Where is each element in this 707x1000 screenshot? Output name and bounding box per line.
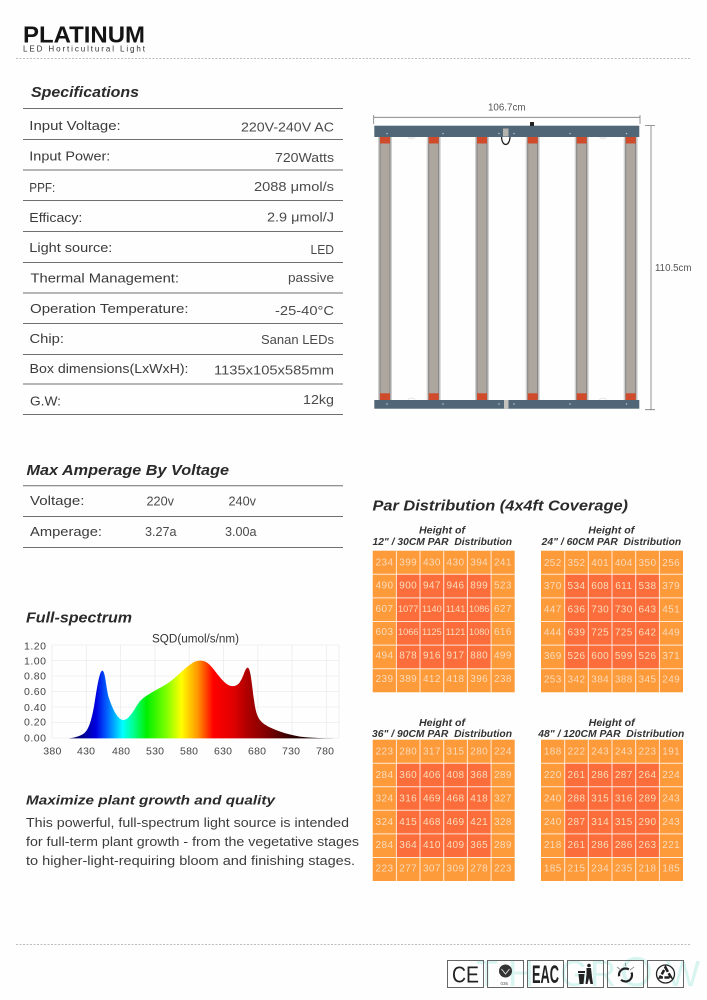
heatmap: 48 inch: 263 <box>639 840 656 851</box>
icon: EAC: EAC <box>532 961 559 989</box>
heatmap: 24 inch: 384 <box>591 674 609 686</box>
chart: spectrum: 0.60 <box>24 686 46 698</box>
panel: max amperage: 3.00a <box>225 525 257 539</box>
chart: spectrum: 580 <box>180 745 198 757</box>
heatmap: 24 inch: Height of <box>588 526 636 537</box>
heatmap: 12 inch: 607 <box>376 604 393 615</box>
heatmap: 36 inch: 421 <box>470 817 488 828</box>
heatmap: 24 inch: 401 <box>591 558 609 569</box>
heatmap: 12 inch: 12" / 30CM PAR Distribution <box>372 537 512 548</box>
heatmap: 12 inch: 603 <box>376 627 393 638</box>
heatmap: 12 inch: 627 <box>494 604 512 615</box>
watermark: T <box>476 953 498 994</box>
heatmap: 24 inch: 350 <box>639 558 656 569</box>
icon: energy mark <box>488 960 524 988</box>
heatmap: 24 inch: 371 <box>662 651 680 662</box>
panel: max amperage: 220v <box>146 495 175 509</box>
heatmap: 48 inch: 286 <box>591 840 609 851</box>
heatmap: 24 inch: 449 <box>662 628 680 638</box>
heatmap: 36 inch: 360 <box>399 770 417 781</box>
heatmap: 24 inch: 538 <box>639 581 656 592</box>
panel: specifications: 1135x105x585mm <box>214 363 334 378</box>
certification icons <box>448 960 684 989</box>
chart: spectrum: 780 <box>316 745 334 757</box>
heatmap: 48 inch: 286 <box>591 770 609 781</box>
heatmap: 12 inch: 399 <box>399 558 417 568</box>
heatmap: 36 inch: 469 <box>423 794 441 804</box>
panel: max amperage: Amperage: <box>30 524 102 539</box>
icon: CE: CE <box>452 962 479 988</box>
heatmap: 48 inch: 218 <box>639 864 656 874</box>
heatmap: 12 inch <box>372 526 515 692</box>
heatmap: 12 inch: 412 <box>423 674 441 685</box>
heatmap: 12 inch: 239 <box>376 674 393 685</box>
heatmap: 36 inch: 469 <box>447 817 464 828</box>
heatmap: 24 inch: 444 <box>544 628 562 638</box>
panel: specifications: passive <box>288 270 334 285</box>
heatmap: 12 inch: 1077 <box>398 604 418 614</box>
heatmap: 24 inch: 253 <box>544 674 562 686</box>
heatmap: 24 inch: 249 <box>662 674 680 686</box>
chart: spectrum: 0.00 <box>24 732 46 744</box>
heatmap: 48 inch: 235 <box>615 864 633 874</box>
heatmap: 24 inch: 352 <box>568 558 585 569</box>
height dimension <box>645 126 692 410</box>
heatmap: 12 inch: 234 <box>376 558 393 568</box>
chart: spectrum: 1.20 <box>24 640 46 652</box>
heatmap: 24 inch: 730 <box>615 604 633 616</box>
chart: spectrum: 0.40 <box>24 702 46 714</box>
heatmap: 36 inch: 327 <box>494 794 512 804</box>
heatmap: 48 inch: 240 <box>544 794 562 804</box>
text block: maximize plant growth: This powerful, full-spectrum light source is intended <box>26 815 349 830</box>
heatmap: 12 inch: 430 <box>423 558 441 568</box>
heatmap: 48 inch: 243 <box>591 746 609 758</box>
heatmap: 24 inch: 342 <box>568 674 585 686</box>
heatmap: 36 inch: 468 <box>447 794 464 804</box>
chart: spectrum: 530 <box>146 745 164 757</box>
panel: specifications: -25-40°C <box>275 303 334 318</box>
heatmap: 24 inch: 526 <box>568 651 585 662</box>
heatmap: 12 inch: 238 <box>494 674 512 685</box>
heatmap: 24 inch: 404 <box>615 558 633 569</box>
width dimension <box>374 102 640 124</box>
heatmap: 48 inch: 290 <box>639 817 656 828</box>
heatmap: 12 inch: 900 <box>399 580 417 592</box>
chart: spectrum <box>24 634 339 757</box>
heading: specifications: Specifications <box>31 84 139 101</box>
heatmap: 48 inch <box>537 718 684 881</box>
heatmap: 36 inch: 278 <box>470 864 488 874</box>
heatmap: 12 inch: 241 <box>494 558 512 568</box>
heatmap: 24 inch: 725 <box>615 628 633 638</box>
heatmap: 48 inch: 220 <box>544 770 562 781</box>
heatmap: 12 inch: 490 <box>376 580 393 592</box>
heatmap: 24 inch: 639 <box>568 628 585 638</box>
panel: max amperage: 240v <box>228 495 257 509</box>
heatmap: 48 inch: 264 <box>639 770 656 781</box>
heatmap: 48 inch: 218 <box>544 840 562 851</box>
heatmap: 36 inch <box>372 718 515 881</box>
heatmap: 36 inch: 409 <box>447 840 464 851</box>
icon: green dot <box>608 960 644 988</box>
heatmap: 48 inch: 240 <box>544 817 562 828</box>
panel: specifications: 220V-240V AC <box>241 120 334 135</box>
heatmap: 24 inch: 600 <box>591 651 609 662</box>
heatmap: 36 inch: 284 <box>376 770 393 781</box>
heatmap: 24 inch: 345 <box>639 674 656 686</box>
heatmap: 48 inch: 234 <box>591 864 609 874</box>
heatmap: 12 inch: 1121 <box>446 627 465 637</box>
heatmap: 48 inch: 316 <box>615 794 633 804</box>
heatmap: 12 inch: 917 <box>447 651 464 662</box>
chart: spectrum: 430 <box>77 745 95 757</box>
heatmap: 12 inch: 523 <box>494 580 512 592</box>
heatmap: 36 inch: 364 <box>399 840 417 851</box>
heatmap: 24 inch: 256 <box>662 558 680 569</box>
heatmap: 48 inch: 224 <box>662 770 680 781</box>
heatmap: 24 inch: 369 <box>544 651 562 662</box>
heatmap: 12 inch: 1086 <box>469 604 489 614</box>
heatmap: 36 inch: 317 <box>423 746 441 758</box>
heatmap: 48 inch: Height of <box>589 718 636 729</box>
panel: specifications: Thermal Management: <box>30 271 179 286</box>
heatmap: 48 inch: 48" / 120CM PAR Distribution <box>537 729 684 740</box>
heatmap: 48 inch: 289 <box>639 794 656 804</box>
panel: specifications: 2.9 μmol/J <box>267 210 334 225</box>
heatmap: 24 inch: 379 <box>662 581 680 592</box>
heatmap: 12 inch: 1066 <box>398 627 418 637</box>
heading: par distribution: Par Distribution (4x4ft Coverage) <box>372 498 628 515</box>
heatmap: 36 inch: 315 <box>447 746 464 758</box>
heatmap: 48 inch: 215 <box>568 864 585 874</box>
heatmap: 12 inch: 616 <box>494 627 512 638</box>
heatmap: 24 inch: 388 <box>615 674 633 686</box>
heatmap: 48 inch: 243 <box>615 746 633 758</box>
chart: spectrum: 1.00 <box>24 655 46 667</box>
heatmap: 36 inch: 316 <box>399 794 417 804</box>
heatmap: 48 inch: 286 <box>615 840 633 851</box>
heatmap: 24 inch: 526 <box>639 651 656 662</box>
heatmap: 36 inch: 324 <box>376 817 393 828</box>
heatmap: 12 inch: 389 <box>399 674 417 685</box>
heatmap: 36 inch: 324 <box>376 794 393 804</box>
icon: tidy man <box>568 960 604 988</box>
text block: maximize plant growth: to higher-light-requiring bloom and finishing stages. <box>26 853 355 868</box>
heatmap: 36 inch: 284 <box>376 840 393 851</box>
watermark <box>476 948 700 995</box>
height dimension: 110.5cm <box>655 263 692 274</box>
heatmap: 12 inch: 418 <box>447 674 464 685</box>
heatmap: 12 inch: 1080 <box>469 627 489 637</box>
panel: specifications <box>23 84 343 414</box>
heatmap: 24 inch: 725 <box>591 628 609 638</box>
panel: specifications: Box dimensions(LxWxH): <box>30 361 188 376</box>
heatmap: 12 inch: 880 <box>470 651 488 662</box>
heatmap: 36 inch: 280 <box>470 746 488 758</box>
heatmap: 48 inch: 288 <box>568 794 585 804</box>
panel: specifications: Chip: <box>30 331 64 346</box>
panel: specifications: 720Watts <box>275 150 335 165</box>
icon: energy mark: 036 <box>500 981 509 986</box>
heading: full-spectrum: Full-spectrum <box>26 610 132 627</box>
heatmap: 36 inch: 280 <box>399 746 417 758</box>
watermark: G <box>560 953 588 994</box>
heatmap: 36 inch: 223 <box>494 864 512 874</box>
heatmap: 48 inch: 287 <box>615 770 633 781</box>
heatmap: 36 inch: 415 <box>399 817 417 828</box>
watermark: O <box>620 948 653 995</box>
logo: PLATINUM: LED Horticultural Light <box>23 44 146 54</box>
heatmap: 36 inch: 406 <box>423 770 441 781</box>
heatmap: 36 inch: 307 <box>423 864 441 874</box>
heatmap: 24 inch: 642 <box>639 628 656 638</box>
chart: spectrum: 0.80 <box>24 670 46 682</box>
logo: PLATINUM: PLATINUM <box>23 22 145 48</box>
panel: max amperage: Voltage: <box>30 493 84 508</box>
heatmap: 48 inch: 185 <box>662 864 680 874</box>
heatmap: 12 inch: 494 <box>376 651 393 662</box>
heatmap: 36 inch: 289 <box>494 840 512 851</box>
heatmap: 12 inch: 916 <box>423 651 441 662</box>
heading: max amperage: Max Amperage By Voltage <box>26 462 229 479</box>
heatmap: 24 inch: 730 <box>591 604 609 616</box>
panel: specifications: 12kg <box>303 392 334 407</box>
panel: specifications: Light source: <box>29 240 112 255</box>
heatmap: 36 inch: 408 <box>447 770 464 781</box>
chart: spectrum: 730 <box>282 745 300 757</box>
heatmap: 24 inch: 608 <box>591 581 609 592</box>
heatmap: 36 inch: 365 <box>470 840 488 851</box>
chart: spectrum: 380 <box>43 745 61 757</box>
heatmap: 24 inch: 451 <box>662 604 680 616</box>
heatmap: 24 inch: 636 <box>568 604 585 616</box>
heatmap: 12 inch: 430 <box>447 558 464 568</box>
panel: specifications: Sanan LEDs <box>261 332 334 347</box>
heatmap: 12 inch: 396 <box>470 674 488 685</box>
chart: spectrum: 480 <box>112 745 130 757</box>
heatmap: 48 inch: 191 <box>662 746 680 758</box>
heatmap: 24 inch: 370 <box>544 581 562 592</box>
heatmap: 48 inch: 261 <box>568 840 585 851</box>
diagram: light fixture with dimensions <box>374 102 692 410</box>
heatmap: 36 inch: 289 <box>494 770 512 781</box>
watermark: H <box>508 953 534 994</box>
heatmap: 12 inch: 499 <box>494 651 512 662</box>
panel: specifications: G.W: <box>30 394 61 409</box>
heatmap: 48 inch: 185 <box>544 864 562 874</box>
heatmap: 36 inch: 309 <box>447 864 464 874</box>
chart: spectrum: 680 <box>248 745 266 757</box>
heatmap: 12 inch: 878 <box>399 651 417 662</box>
heatmap: 36 inch: 36" / 90CM PAR Distribution <box>372 729 512 740</box>
panel: max amperage <box>23 462 343 548</box>
heatmap: 36 inch: 410 <box>423 840 441 851</box>
watermark: W <box>666 953 700 994</box>
text block: maximize plant growth: for full-term plant growth - from the vegetative stages <box>26 834 360 849</box>
heatmap: 36 inch: 368 <box>470 770 488 781</box>
heatmap: 48 inch: 315 <box>615 817 633 828</box>
heatmap: 48 inch: 222 <box>568 746 585 758</box>
heatmap: 48 inch: 314 <box>591 817 609 828</box>
heatmap: 24 inch: 611 <box>615 581 632 592</box>
panel: specifications: PPF: <box>29 180 55 195</box>
heatmap: 48 inch: 287 <box>568 817 585 828</box>
heatmap: 24 inch: 643 <box>639 604 656 616</box>
heatmap: 12 inch: 394 <box>470 558 488 568</box>
heatmap: 48 inch: 188 <box>544 746 562 758</box>
watermark: R <box>590 953 616 994</box>
panel: max amperage: 3.27a <box>145 525 177 539</box>
heatmap: 12 inch: 946 <box>447 580 464 592</box>
panel: specifications: LED <box>310 242 334 257</box>
heatmap: 24 inch: 534 <box>568 581 585 592</box>
heatmap: 12 inch: Height of <box>419 526 467 537</box>
heatmap: 24 inch: 447 <box>544 604 562 616</box>
heatmap: 36 inch: 223 <box>376 864 393 874</box>
heatmap: 24 inch: 599 <box>615 651 633 662</box>
heatmap: 12 inch: 1125 <box>422 627 442 637</box>
heatmap: 12 inch: 1140 <box>422 604 442 614</box>
heatmap: 48 inch: 243 <box>662 817 680 828</box>
panel: specifications: Operation Temperature: <box>30 301 188 316</box>
heatmap: 48 inch: 261 <box>568 770 585 781</box>
heatmap: 24 inch: 252 <box>544 558 562 569</box>
heatmap: 24 inch: 24" / 60CM PAR Distribution <box>541 537 681 548</box>
panel: specifications: Input Voltage: <box>29 118 121 133</box>
heatmap: 48 inch: 223 <box>639 746 656 758</box>
heatmap: 36 inch: 468 <box>423 817 441 828</box>
heatmap: 36 inch: Height of <box>419 718 467 729</box>
text block: maximize plant growth: Maximize plant growth and quality <box>26 792 276 808</box>
text block: maximize plant growth <box>26 792 360 868</box>
heatmap: 36 inch: 223 <box>376 746 393 758</box>
icon: EAC <box>528 960 564 989</box>
heatmap: 12 inch: 899 <box>470 580 488 592</box>
chart: spectrum: 0.20 <box>24 717 46 729</box>
width dimension: 106.7cm <box>488 102 526 114</box>
heatmap: 36 inch: 224 <box>494 746 512 758</box>
heatmap: 36 inch: 277 <box>399 864 417 874</box>
chart: spectrum: 630 <box>214 745 232 757</box>
panel: specifications: 2088 μmol/s <box>254 179 335 194</box>
panel: specifications: Input Power: <box>29 148 110 164</box>
icon: recycling <box>648 960 684 988</box>
heatmap: 12 inch: 1141 <box>446 604 465 614</box>
heatmap: 48 inch: 243 <box>662 794 680 804</box>
heatmap: 48 inch: 221 <box>662 840 680 851</box>
bars <box>378 137 638 400</box>
panel: specifications: Efficacy: <box>29 210 82 225</box>
heatmap: 24 inch <box>541 526 683 692</box>
heatmap: 36 inch: 328 <box>494 817 512 828</box>
heatmap: 36 inch: 418 <box>470 794 488 804</box>
chart: spectrum: SQD(umol/s/nm) <box>152 634 239 646</box>
heatmap: 12 inch: 947 <box>423 580 441 592</box>
heatmap: 48 inch: 315 <box>591 794 609 804</box>
